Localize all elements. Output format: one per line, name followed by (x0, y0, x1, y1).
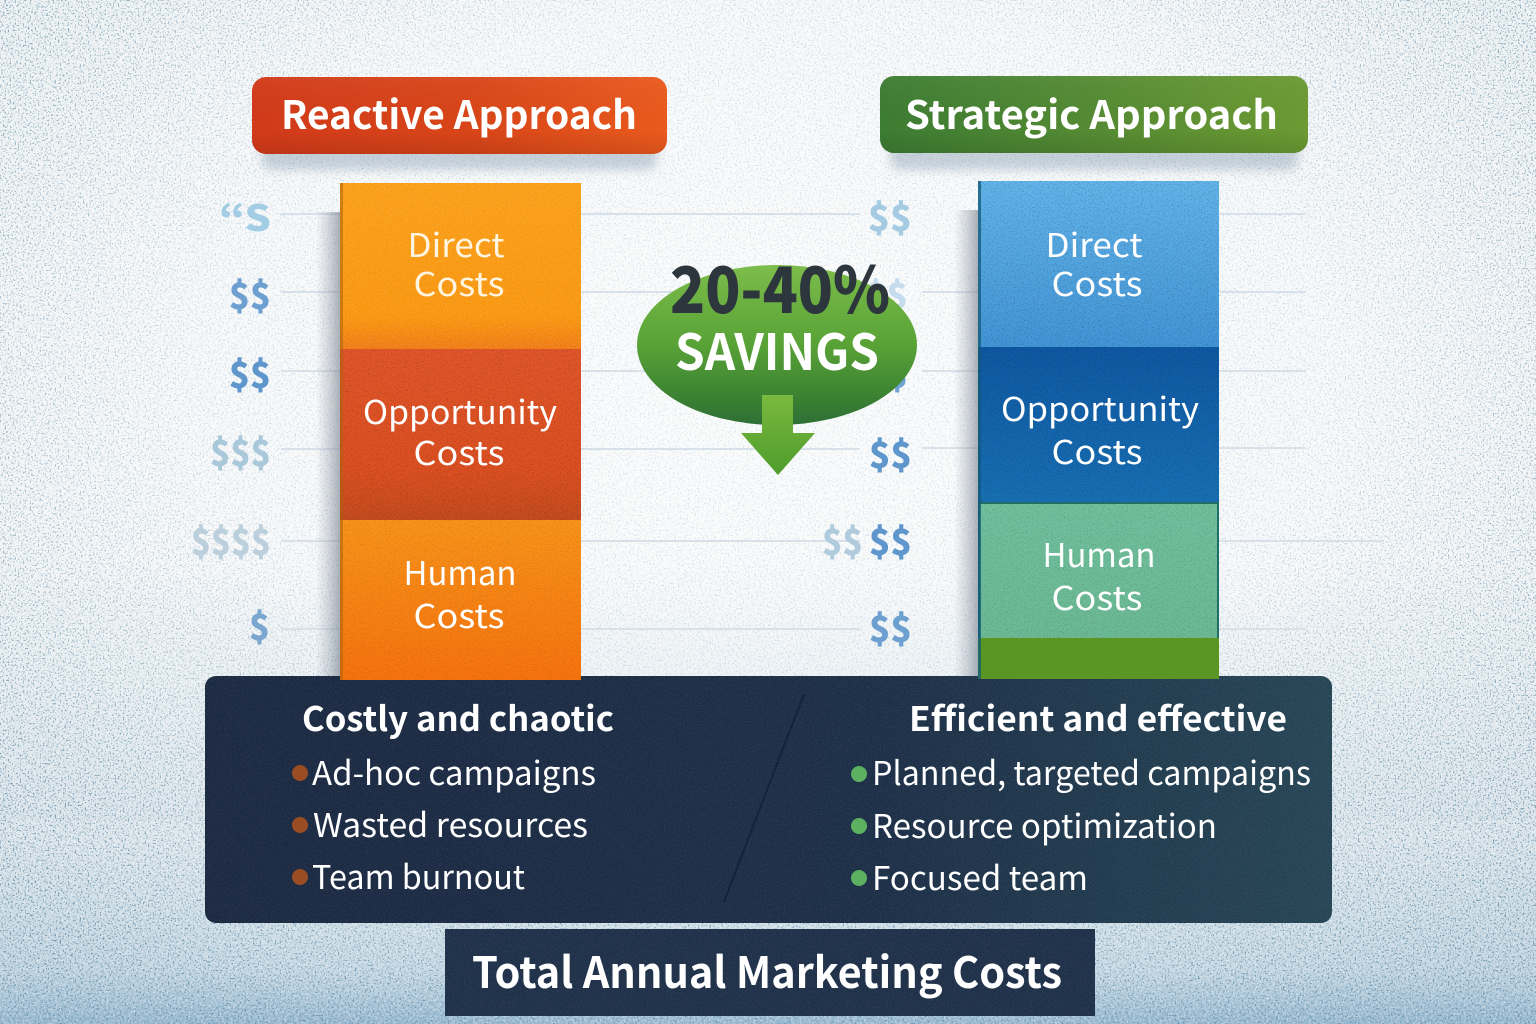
dollar axis: reactive: $$ (229, 268, 271, 320)
arrow: savings down (741, 395, 815, 475)
segment: opportunity costs: Opportunity (363, 386, 557, 434)
dollar axis: strategic: $$ (869, 601, 912, 653)
heading: Strategic Approach: Strategic Approach (905, 85, 1278, 141)
savings callout (637, 240, 917, 475)
dollar axis: strategic (822, 190, 912, 653)
dollar axis: reactive: $$ (229, 347, 271, 399)
heading: Reactive Approach (252, 77, 667, 170)
segment: direct costs (978, 181, 1219, 348)
segment: human costs (340, 520, 581, 680)
segment: direct costs: Costs (1052, 258, 1142, 306)
dollar axis: reactive: $ (249, 599, 270, 651)
grid lines (281, 214, 1384, 629)
segment: opportunity costs: Opportunity (1001, 383, 1199, 431)
dollar axis: strategic: $$ (865, 268, 908, 320)
reactive summary (292, 692, 614, 899)
bar: strategic costs (954, 181, 1219, 679)
dollar axis: strategic: $$ (869, 514, 912, 566)
heading: Strategic Approach (880, 76, 1308, 170)
reactive summary: Ad-hoc campaigns (312, 747, 596, 795)
segment: human costs: Costs (414, 590, 504, 638)
reactive summary: Costly and chaotic (302, 692, 614, 741)
segment: base (978, 638, 1219, 679)
dollar axis: strategic: $$ (822, 514, 863, 566)
strategic summary: Focused team (872, 852, 1088, 900)
strategic summary (851, 692, 1311, 900)
dollar axis: reactive: $$$ (210, 425, 271, 477)
segment: direct costs: Costs (414, 258, 504, 306)
dollar axis: reactive (191, 190, 271, 651)
dollar axis: reactive: $$$$ (191, 514, 271, 566)
segment: opportunity costs: Costs (1052, 426, 1142, 474)
strategic summary: Planned, targeted campaigns (872, 747, 1311, 795)
dollar axis: strategic: $$ (865, 347, 908, 399)
segment: opportunity costs: Costs (414, 427, 504, 475)
segment: direct costs: Direct (408, 219, 504, 267)
bar: reactive costs (316, 183, 581, 680)
dollar axis: strategic: $$ (868, 190, 912, 242)
panel: summary comparison (205, 676, 1332, 923)
strategic summary: Efficient and effective (909, 692, 1287, 741)
title: total annual marketing costs: Total Annual Marketing Costs (472, 939, 1062, 1001)
strategic summary: Resource optimization (872, 800, 1217, 848)
title: total annual marketing costs (445, 929, 1095, 1016)
segment: direct costs: Direct (1046, 219, 1142, 267)
reactive summary: Wasted resources (313, 799, 588, 847)
segment: human costs: Human (1042, 529, 1156, 577)
segment: direct costs (340, 183, 581, 350)
dollar axis: strategic: $$ (869, 427, 912, 479)
heading: Reactive Approach: Reactive Approach (281, 85, 637, 141)
oval badge (637, 265, 917, 425)
segment: human costs: Costs (1052, 572, 1142, 620)
segment: opportunity costs (978, 347, 1219, 504)
savings label: SAVINGS (675, 313, 879, 385)
savings percentage: 20-40% (670, 240, 890, 332)
segment: opportunity costs (340, 349, 581, 521)
reactive summary: Team burnout (312, 851, 525, 899)
segment: human costs: Human (404, 547, 516, 595)
segment: human costs (979, 503, 1218, 639)
dollar axis: reactive: “S (219, 190, 271, 242)
